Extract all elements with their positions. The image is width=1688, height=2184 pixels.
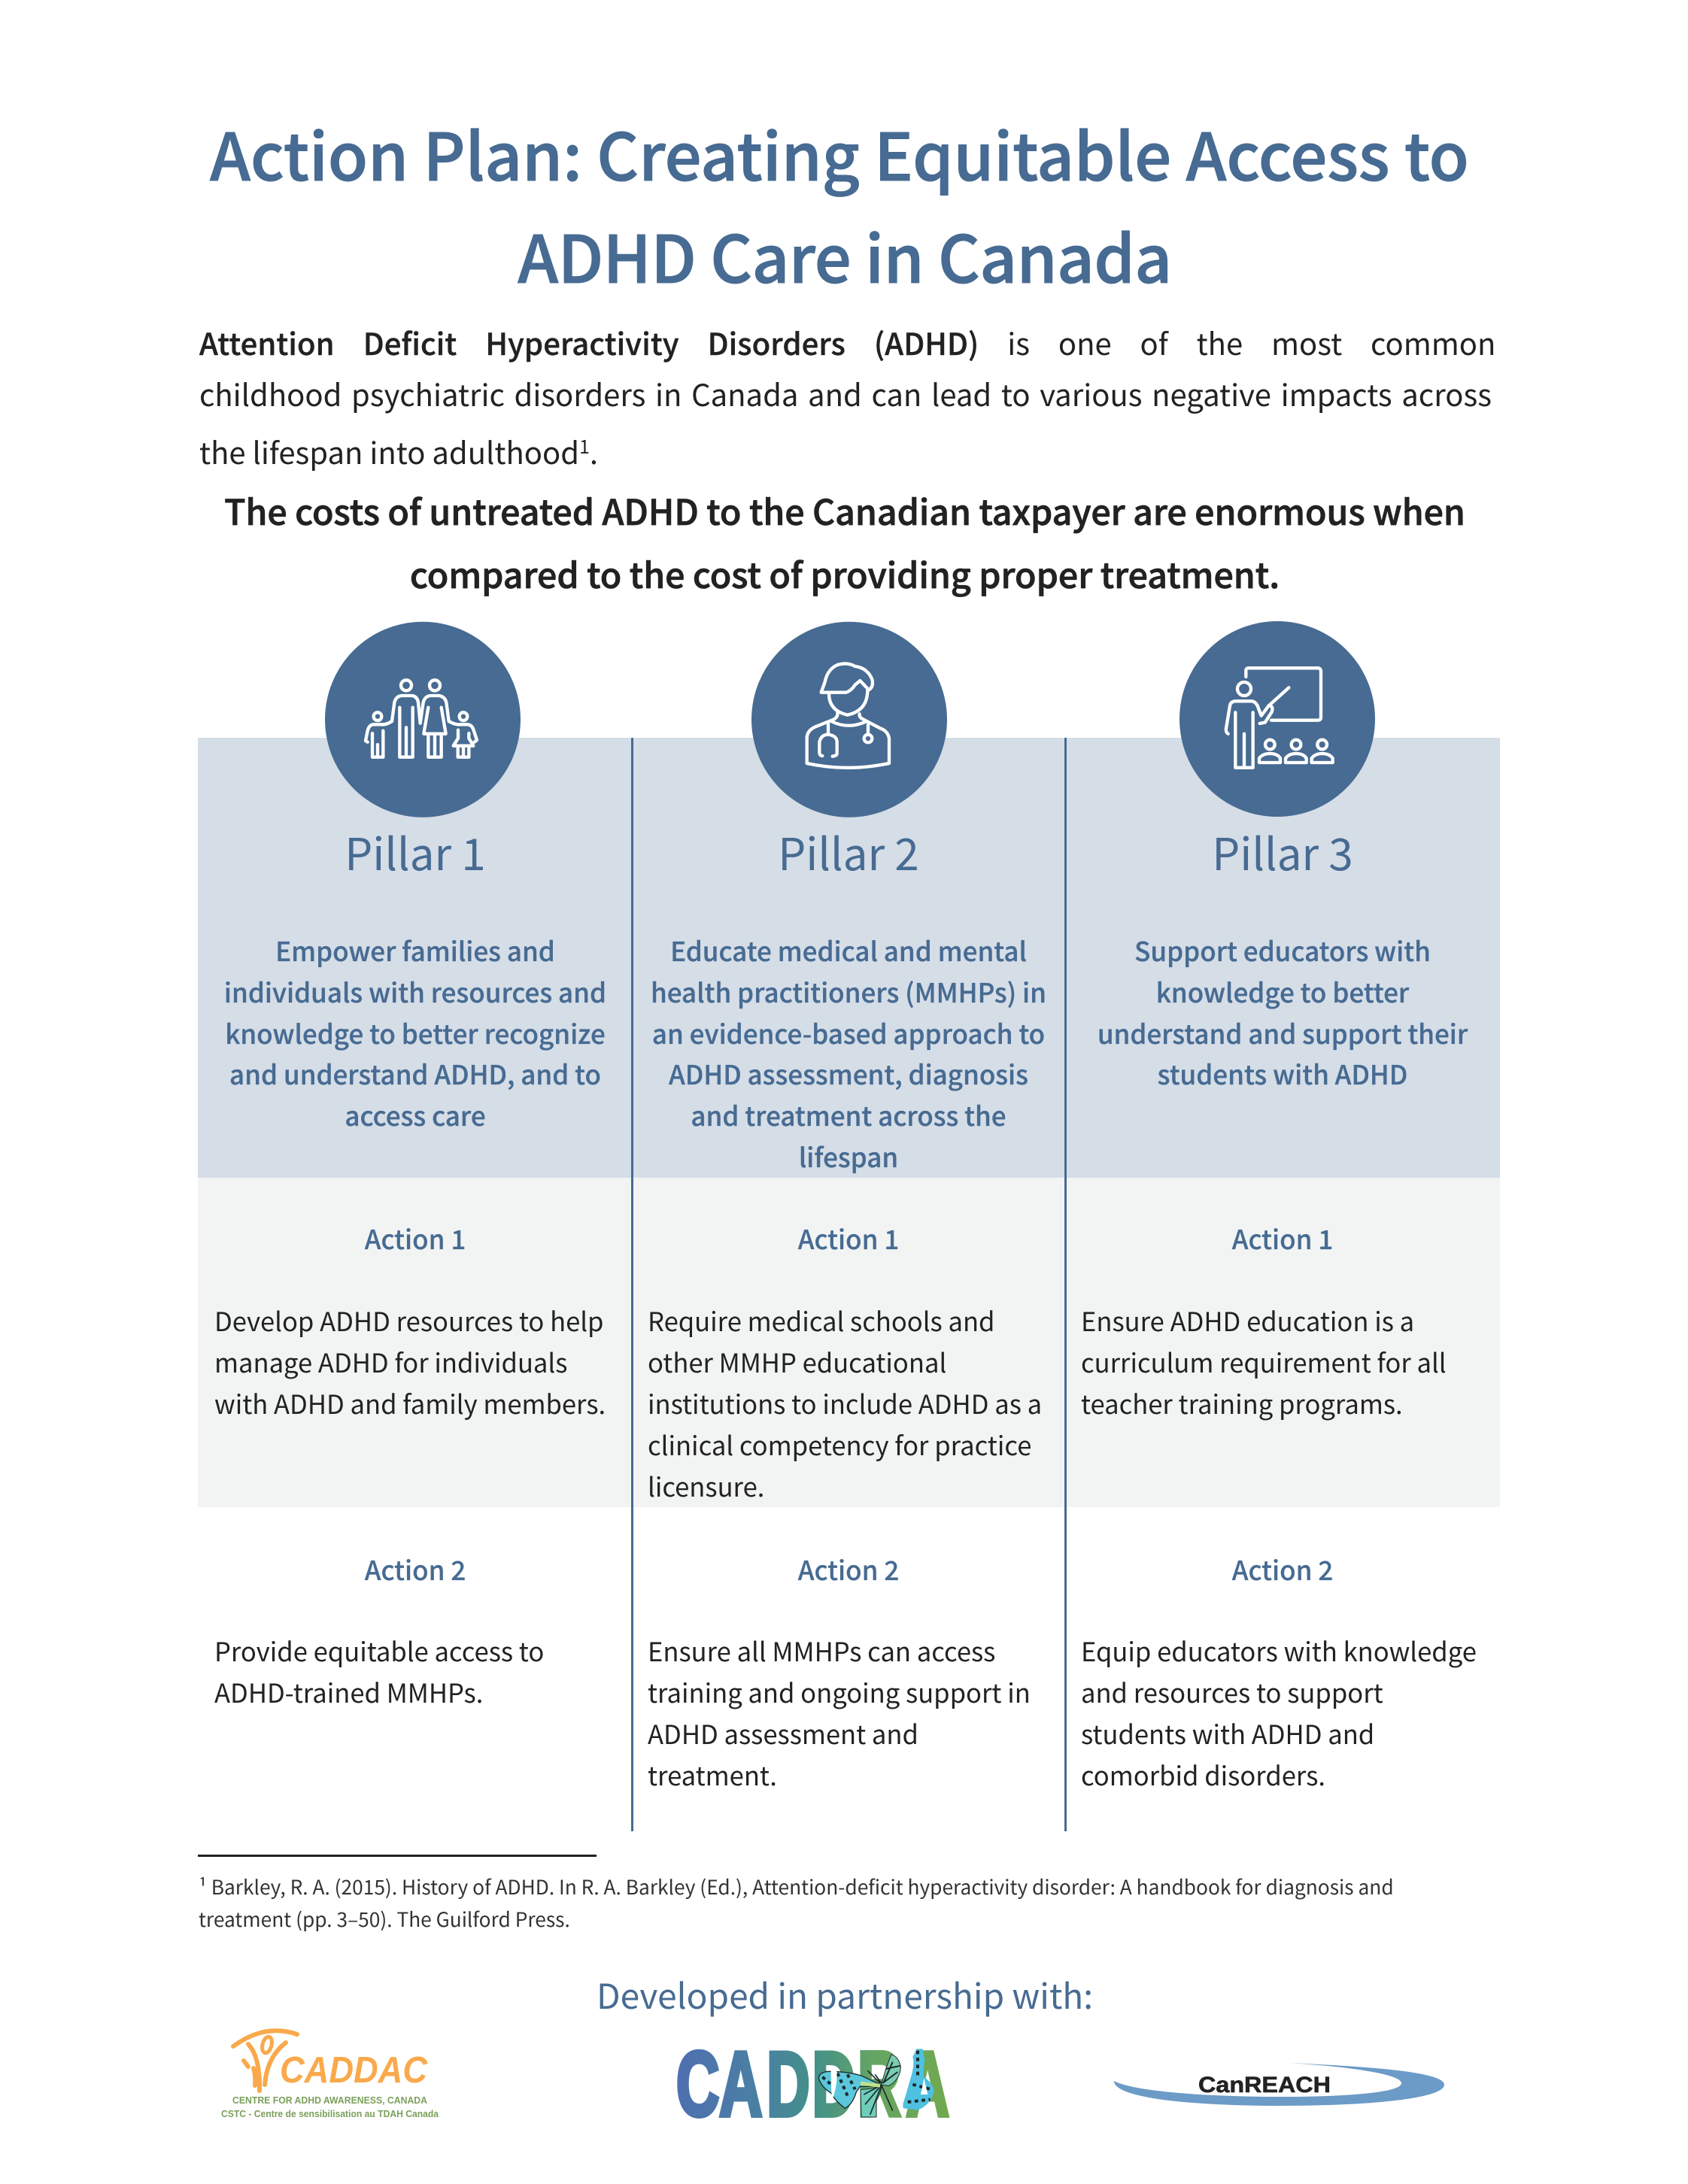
title: ADHD Care in Canada [518, 208, 1172, 302]
heading: pillar 2: Pillar 2 [778, 819, 919, 883]
intro paragraph: Attention Deficit Hyperactivity Disorders (ADHD) is one of the most common [199, 320, 1495, 364]
pillar 2 goal: Educate medical and mental [670, 931, 1027, 969]
pillar 2 action 1: Require medical schools and [648, 1301, 994, 1339]
logo: CADDAC: CENTRE FOR ADHD AWARENESS, CANADA [232, 2095, 428, 2106]
key message [224, 485, 1465, 599]
column divider right [1064, 738, 1067, 1831]
pillar 3 goal [1098, 931, 1468, 1093]
pillar 2 action 2: training and ongoing support in [648, 1673, 1031, 1710]
pillar 2 goal [651, 931, 1046, 1175]
logo: CADDAC: CSTC - Centre de sensibilisation au TDAH Canada [221, 2108, 439, 2119]
pillar 3 action 2 [1081, 1550, 1477, 1793]
intro paragraph: . [590, 429, 598, 473]
pillar 3 goal: Support educators with [1134, 931, 1431, 969]
footnote: ¹ Barkley, R. A. (2015). History of ADHD. In R. A. Barkley (Ed.), Attention-deficit hyperactivity disorder: A handbook for diagnosis and [199, 1871, 1394, 1900]
pillar 3 action 1: Action 1 [1232, 1219, 1333, 1257]
pillar 2 goal: and treatment across the [691, 1096, 1006, 1134]
logo: CADDAC [221, 2031, 439, 2119]
pillar 3 action 1 [1081, 1219, 1447, 1421]
key message: The costs of untreated ADHD to the Canadian taxpayer are enormous when [224, 485, 1465, 535]
title: Action Plan: Creating Equitable Access to [210, 105, 1469, 199]
pillar 3 action 1: Ensure ADHD education is a [1081, 1301, 1414, 1339]
pillar 1 action 1: Action 1 [365, 1219, 466, 1257]
pillar 1 action 1: Develop ADHD resources to help [214, 1301, 603, 1339]
icon: doctor [751, 622, 947, 817]
pillar 1 action 1: with ADHD and family members. [214, 1384, 606, 1421]
intro paragraph [199, 320, 1495, 473]
logo: CADDAC: CADDAC [280, 2050, 428, 2091]
pillar 2 action 2: Action 2 [798, 1550, 899, 1588]
partnership heading: Developed in partnership with: [597, 1970, 1093, 2019]
pillar 3 action 1: curriculum requirement for all [1081, 1342, 1447, 1380]
intro paragraph: the lifespan into adulthood [199, 429, 579, 473]
panel: pillar 2 [648, 622, 1046, 1793]
logo: CanREACH: CanREACH [1198, 2073, 1331, 2098]
pillar 3 goal: understand and support their [1098, 1014, 1468, 1052]
pillar 1 action 1 [214, 1219, 606, 1421]
pillar 3 action 2: and resources to support [1081, 1673, 1383, 1710]
pillar 2 action 1: institutions to include ADHD as a [648, 1384, 1042, 1421]
pillar 3 goal: students with ADHD [1158, 1054, 1407, 1093]
pillar 2 action 2 [648, 1550, 1031, 1793]
pillar 2 goal: an evidence-based approach to [652, 1014, 1045, 1052]
pillar 3 action 2: students with ADHD and [1081, 1714, 1374, 1752]
logo: CanREACH [1114, 2063, 1444, 2106]
logo: CADDRA: CADDRA [676, 2033, 949, 2135]
pillar 1 goal: individuals with resources and [224, 972, 606, 1011]
icon: teacher [1179, 621, 1375, 817]
pillar 1 goal: Empower families and [275, 931, 555, 969]
pillar 2 goal: ADHD assessment, diagnosis [669, 1054, 1028, 1093]
pillar 1 goal [224, 931, 606, 1134]
pillar 3 action 2: Equip educators with knowledge [1081, 1631, 1477, 1669]
intro paragraph: 1 [579, 432, 590, 460]
pillar 2 goal: lifespan [799, 1137, 898, 1175]
pillar 1 goal: and understand ADHD, and to [229, 1054, 601, 1093]
pillar 1 action 2 [214, 1550, 544, 1710]
intro paragraph: childhood psychiatric disorders in Canada and can lead to various negative impacts across [199, 372, 1492, 415]
pillar 2 action 1: Action 1 [798, 1219, 899, 1257]
icon: family [325, 622, 521, 817]
pillar 2 action 2: ADHD assessment and [648, 1714, 918, 1752]
key message: compared to the cost of providing proper treatment. [410, 548, 1280, 599]
footnote: treatment (pp. 3–50). The Guilford Press. [199, 1903, 570, 1933]
footnote rule [198, 1855, 597, 1857]
pillar 2 action 2: Ensure all MMHPs can access [648, 1631, 995, 1669]
pillar 2 action 2: treatment. [648, 1755, 777, 1793]
heading: pillar 1: Pillar 1 [345, 819, 486, 883]
title [210, 105, 1469, 302]
pillar 2 action 1: other MMHP educational [648, 1342, 946, 1380]
pillar 2 goal: health practitioners (MMHPs) in [651, 972, 1046, 1011]
pillar 3 action 1: teacher training programs. [1081, 1384, 1403, 1421]
pillar 1 goal: access care [345, 1096, 486, 1134]
column divider left [631, 738, 633, 1831]
pillar 1 action 2: ADHD-trained MMHPs. [214, 1673, 483, 1710]
pillar 3 action 2: comorbid disorders. [1081, 1755, 1325, 1793]
pillar 2 action 1: licensure. [648, 1467, 764, 1504]
pillar 3 goal: knowledge to better [1156, 972, 1410, 1011]
table background bands [198, 738, 1500, 1507]
panel: pillar 3 [1081, 621, 1477, 1793]
footnote [199, 1871, 1394, 1933]
pillar 1 goal: knowledge to better recognize [225, 1014, 606, 1052]
pillar 1 action 1: manage ADHD for individuals [214, 1342, 567, 1380]
panel: pillar 1 [214, 622, 606, 1710]
pillar 2 action 1: clinical competency for practice [648, 1425, 1031, 1463]
pillar 1 action 2: Provide equitable access to [214, 1631, 544, 1669]
icon: butterfly [818, 2049, 934, 2117]
heading: pillar 3: Pillar 3 [1212, 819, 1353, 883]
pillar 2 action 1 [648, 1219, 1042, 1504]
pillar 1 action 2: Action 2 [365, 1550, 466, 1588]
pillar 3 action 2: Action 2 [1232, 1550, 1333, 1588]
